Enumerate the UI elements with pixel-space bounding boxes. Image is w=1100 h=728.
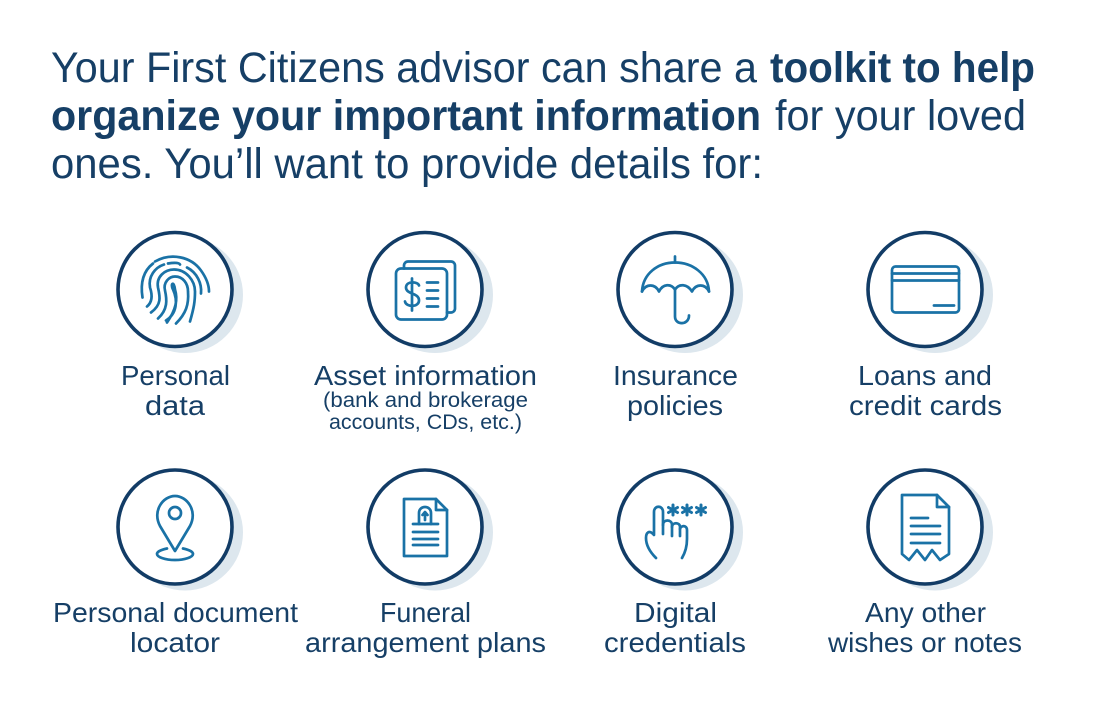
panel: personal data xyxy=(118,232,243,421)
label: Digital xyxy=(634,597,717,628)
title: Your First Citizens advisor can share a xyxy=(51,44,757,92)
title xyxy=(51,44,1035,188)
label: Personal xyxy=(121,360,230,391)
panel: funeral arrangement plans xyxy=(305,470,546,658)
title: for your loved xyxy=(775,92,1026,140)
label xyxy=(604,597,746,658)
label: credentials xyxy=(604,627,746,658)
label: accounts, CDs, etc.) xyxy=(329,411,522,434)
icon: credit card xyxy=(868,232,993,353)
icon: fingerprint xyxy=(118,232,243,353)
label xyxy=(849,360,1002,421)
panel: insurance policies xyxy=(613,232,743,421)
label: Loans and xyxy=(858,360,992,391)
icon: umbrella xyxy=(618,232,743,353)
panel: asset information xyxy=(314,232,537,434)
title: ones. You’ll want to provide details for: xyxy=(51,140,763,188)
title: toolkit to help xyxy=(770,44,1035,92)
label: credit cards xyxy=(849,390,1002,421)
icon: financial documents xyxy=(368,232,493,353)
label xyxy=(53,597,298,658)
label xyxy=(305,597,546,658)
label: Asset information xyxy=(314,360,537,391)
label: wishes or notes xyxy=(827,627,1022,658)
icon: torn paper note xyxy=(868,470,993,590)
label: Any other xyxy=(865,597,986,628)
label: Funeral xyxy=(380,597,471,628)
label: locator xyxy=(130,627,220,658)
panel: digital credentials xyxy=(604,470,746,658)
label: Personal document xyxy=(53,597,298,628)
panel: any other wishes or notes xyxy=(827,470,1022,658)
label: data xyxy=(145,390,206,421)
label: Insurance xyxy=(613,360,738,391)
icon: map pin xyxy=(118,470,243,590)
label: policies xyxy=(627,390,723,421)
label: arrangement plans xyxy=(305,627,546,658)
icon: hand with password xyxy=(618,470,743,590)
panel: loans and credit cards xyxy=(849,232,1002,421)
icon: funeral document xyxy=(368,470,493,590)
label xyxy=(314,360,537,434)
panel: personal document locator xyxy=(53,470,298,658)
label xyxy=(613,360,738,421)
label xyxy=(121,360,230,421)
label xyxy=(827,597,1022,658)
title: organize your important information xyxy=(51,92,761,140)
label: (bank and brokerage xyxy=(323,389,528,412)
